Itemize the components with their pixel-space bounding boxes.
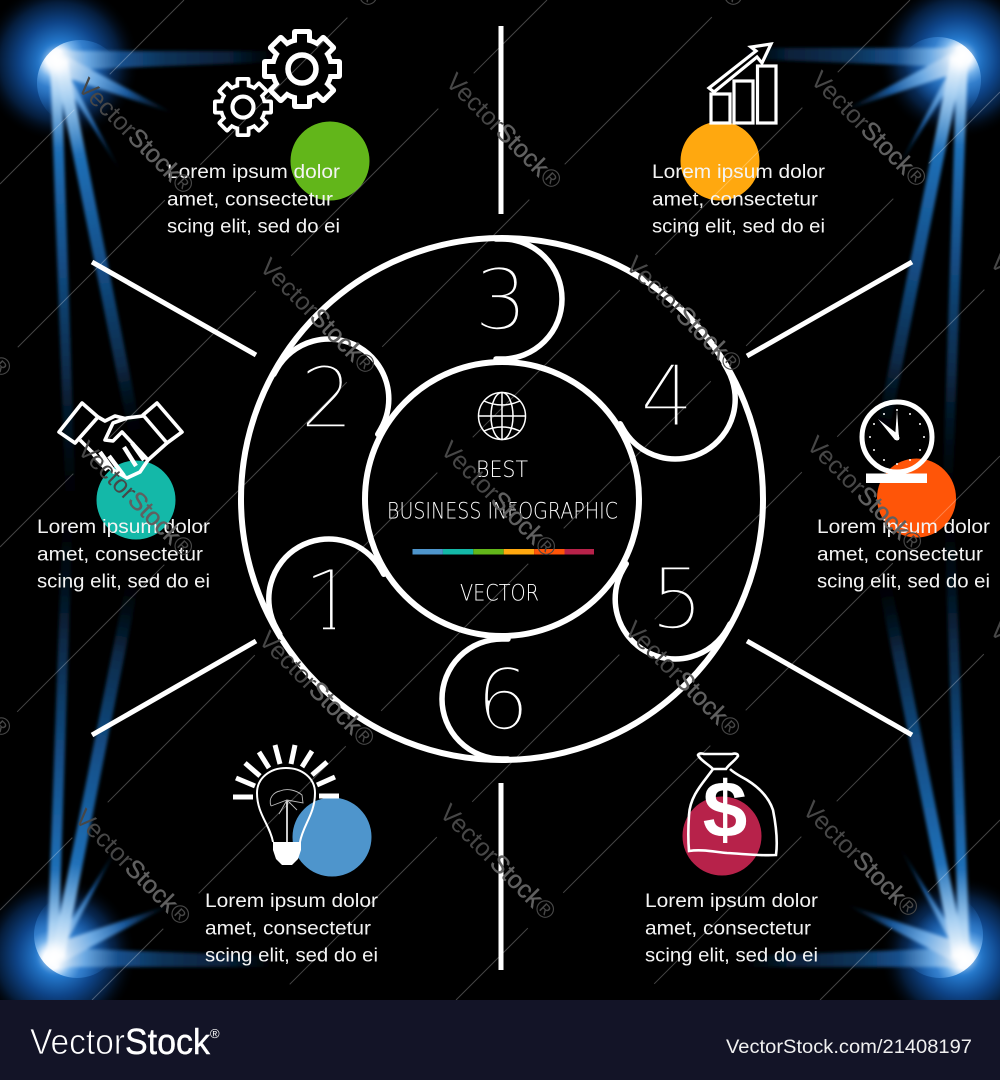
text block: step top right: scing elit, sed do ei xyxy=(652,216,825,238)
icon: clock xyxy=(862,402,932,483)
text block: step top right: amet, consectetur xyxy=(652,190,819,210)
watermark overlay: VectorStock® xyxy=(805,66,933,193)
text block: step middle right: Lorem ipsum dolor xyxy=(817,517,991,538)
coloured circle: green xyxy=(290,122,370,200)
footer logo: ® xyxy=(210,1026,220,1041)
corner light flare: top right xyxy=(743,0,1000,507)
watermark overlay: VectorStock® xyxy=(620,251,748,378)
corner light flare: top left xyxy=(0,0,275,510)
outer ring xyxy=(241,238,763,760)
divider line: lower right xyxy=(747,641,912,735)
text block: step bottom left: Lorem ipsum dolor xyxy=(205,891,379,912)
watermark overlay: VectorStock® xyxy=(72,73,200,200)
icon: light bulb xyxy=(233,745,339,865)
icon: globe xyxy=(478,392,526,440)
text block: step top left: Lorem ipsum dolor xyxy=(167,162,341,183)
lobe 2 xyxy=(274,317,411,434)
number 5: 5 xyxy=(650,550,704,648)
coloured circle: crimson xyxy=(682,796,762,876)
coloured circle: amber xyxy=(680,122,760,200)
watermark overlay: VectorStock® xyxy=(801,431,929,558)
divider line: lower left xyxy=(92,641,256,735)
watermark overlay: VectorStock® xyxy=(253,626,381,753)
lobe 1 xyxy=(247,517,384,634)
text block: step top left: scing elit, sed do ei xyxy=(167,216,340,238)
divider line: upper left xyxy=(92,262,256,355)
inner ring xyxy=(365,362,639,636)
coloured circle: orange xyxy=(877,458,956,538)
icon: handshake xyxy=(59,403,182,478)
text block: step bottom right: scing elit, sed do ei xyxy=(645,946,818,966)
watermark overlay: VectorStock® xyxy=(434,799,562,926)
icon: gears xyxy=(213,29,342,137)
title: BEST: BEST xyxy=(476,458,528,483)
number 4: 4 xyxy=(640,347,694,445)
text block: step middle left: scing elit, sed do ei xyxy=(37,572,210,592)
text block: step bottom right: Lorem ipsum dolor xyxy=(645,891,819,912)
icon: bar chart with arrow xyxy=(709,44,776,123)
text block: step middle right: amet, consectetur xyxy=(817,544,984,566)
number 1: 1 xyxy=(303,552,357,650)
watermark overlay: VectorStock® xyxy=(619,616,747,743)
lobe 4 xyxy=(620,364,757,481)
coloured circle: blue xyxy=(292,798,372,876)
text block: step top right: Lorem ipsum dolor xyxy=(652,162,826,183)
watermark overlay: VectorStock® xyxy=(254,253,382,380)
number 6: 6 xyxy=(476,651,530,749)
watermark overlay: VectorStock® xyxy=(797,796,925,923)
footer bar xyxy=(0,1000,1000,1080)
divider line: bottom xyxy=(498,783,504,970)
lobe 5 xyxy=(593,564,730,681)
text block: step middle right: scing elit, sed do ei xyxy=(817,572,990,592)
text block: step top left: amet, consectetur xyxy=(167,190,334,210)
corner light flare: bottom left xyxy=(0,508,272,1036)
coloured circle: teal xyxy=(96,460,176,540)
watermark overlay: VectorStock® xyxy=(69,804,197,931)
watermark overlay: VectorStock® xyxy=(435,436,563,563)
footer logo: Stock xyxy=(125,1021,211,1062)
footer logo xyxy=(30,1021,220,1062)
corner light flare: bottom right xyxy=(745,508,1000,1036)
watermark overlay: VectorStock® xyxy=(440,68,568,195)
icon: money bag: $ xyxy=(703,765,747,854)
text block: step middle left: Lorem ipsum dolor xyxy=(37,517,211,538)
divider line: top xyxy=(498,26,504,214)
lobe 6 xyxy=(442,639,508,759)
subtitle: VECTOR: VECTOR xyxy=(460,582,539,606)
lobe 3 xyxy=(496,239,562,359)
watermark overlay: VectorStock® xyxy=(72,436,200,563)
icon: money bag xyxy=(688,753,777,855)
title: BUSINESS INFOGRAPHIC: BUSINESS INFOGRAPHIC xyxy=(387,500,618,524)
number 2: 2 xyxy=(300,349,354,447)
central ring diagram xyxy=(241,238,763,760)
text block: step middle left: amet, consectetur xyxy=(37,544,204,566)
footer logo: Vector xyxy=(30,1021,125,1062)
text block: step bottom right: amet, consectetur xyxy=(645,918,812,940)
footer image id: VectorStock.com/21408197 xyxy=(726,1037,972,1058)
number 3: 3 xyxy=(474,251,528,349)
colour bar xyxy=(412,549,594,554)
divider line: upper right xyxy=(747,262,912,356)
text block: step bottom left: scing elit, sed do ei xyxy=(205,946,378,966)
text block: step bottom left: amet, consectetur xyxy=(205,918,372,940)
